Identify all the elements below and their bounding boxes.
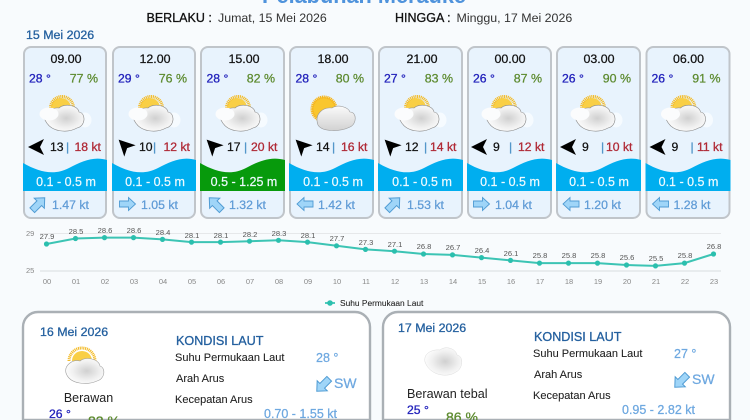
- wave height: [467, 159, 552, 191]
- panel: 18.00 forecast: [289, 47, 374, 218]
- wave height: [23, 159, 107, 191]
- line chart: sea surface temperature: 20: [623, 277, 631, 286]
- panel: 18.00 forecast: 28 °: [296, 72, 317, 86]
- validity start: [146, 11, 327, 25]
- panel: 15.00 forecast: 15.00: [228, 52, 260, 66]
- panel: 18.00 forecast: 80 %: [336, 72, 364, 86]
- line chart: sea surface temperature: 28.1: [214, 231, 228, 240]
- panel: 16 Mei forecast: Berawan: [64, 391, 113, 405]
- line chart: sea surface temperature: 22: [681, 277, 689, 286]
- line chart: sea surface temperature: 26.8: [707, 242, 721, 251]
- panel: 15.00 forecast: 28 °: [206, 72, 228, 86]
- line chart: sea surface temperature: 26.8: [417, 242, 431, 251]
- panel: 03.00 forecast: 26 °: [562, 72, 584, 86]
- wind direction arrow: [113, 134, 136, 157]
- line chart: sea surface temperature: 25.8: [591, 251, 605, 260]
- line chart: sea surface temperature: 28.6: [98, 226, 112, 235]
- wind direction arrow: [28, 139, 44, 155]
- line chart: sea surface temperature: 00: [43, 277, 51, 286]
- panel: 16 Mei forecast: 16 Mei 2026: [40, 325, 108, 339]
- current arrow: [27, 193, 50, 215]
- panel: 16 Mei forecast: Arah Arus: [176, 373, 225, 385]
- panel: 17 Mei forecast: Kecepatan Arus: [533, 390, 611, 402]
- line chart: sea surface temperature: 28.4: [156, 228, 170, 237]
- panel: 06.00 forecast: [646, 47, 730, 218]
- panel: 03.00 forecast: 90 %: [603, 72, 631, 86]
- panel: 00.00 forecast: 26 °: [473, 72, 495, 86]
- panel: 17 Mei forecast: [383, 312, 730, 420]
- icon: partly cloudy: [40, 96, 92, 131]
- line chart: sea surface temperature: 04: [159, 277, 167, 286]
- panel: 15.00 forecast: 17: [227, 140, 241, 154]
- panel: 09.00 forecast: |: [66, 140, 69, 154]
- line chart: sea surface temperature: 08: [275, 277, 283, 286]
- line chart: sea surface temperature: 14: [449, 277, 457, 286]
- panel: 09.00 forecast: 1.47 kt: [52, 198, 89, 212]
- line chart: sea surface temperature: 25.6: [620, 253, 634, 262]
- line chart: sea surface temperature: 12: [391, 277, 399, 286]
- panel: 21.00 forecast: 21.00: [406, 52, 438, 66]
- current direction arrow: [670, 370, 692, 392]
- line chart: sea surface temperature: 26.1: [504, 249, 518, 258]
- panel: 00.00 forecast: [467, 47, 552, 218]
- panel: 15.00 forecast: 1.32 kt: [229, 198, 266, 212]
- panel: 03.00 forecast: 03.00: [583, 52, 615, 66]
- line chart: sea surface temperature: 17: [536, 277, 544, 286]
- wind direction arrow: [560, 139, 576, 155]
- panel: 21.00 forecast: |: [424, 140, 427, 154]
- wave height: [556, 159, 641, 191]
- panel: 06.00 forecast: 06.00: [673, 52, 704, 66]
- panel: 15.00 forecast: 0.5 - 1.25 m: [211, 175, 277, 189]
- panel: 15.00 forecast: |: [244, 140, 247, 154]
- icon: sun behind cloud: [312, 97, 355, 131]
- icon: partly cloudy: [216, 96, 268, 131]
- line chart: sea surface temperature: 10: [333, 277, 341, 286]
- line chart: sea surface temperature: 11: [362, 277, 370, 286]
- validity end: HINGGA :: [395, 11, 451, 25]
- panel: 03.00 forecast: 0.1 - 0.5 m: [569, 175, 629, 189]
- panel: 09.00 forecast: 09.00: [50, 52, 82, 66]
- panel: 18.00 forecast: 14: [316, 140, 330, 154]
- panel: 03.00 forecast: |: [601, 140, 604, 154]
- line chart: sea surface temperature: 13: [420, 277, 428, 286]
- current arrow: [382, 193, 405, 215]
- line chart: sea surface temperature: 16: [507, 277, 515, 286]
- panel: 15.00 forecast: 20 kt: [251, 140, 278, 154]
- panel: 12.00 forecast: 29 °: [118, 72, 140, 86]
- line chart: sea surface temperature: 25: [26, 266, 34, 275]
- current arrow: [297, 198, 313, 210]
- panel: 16 Mei forecast: Suhu Permukaan Laut: [175, 352, 284, 364]
- icon: heavy cloud: [425, 348, 462, 375]
- line chart: sea surface temperature: 27.9: [40, 232, 54, 241]
- panel: 00.00 forecast: |: [509, 140, 512, 154]
- icon: cloudy with sun: [66, 348, 104, 383]
- line chart: sea surface temperature: 26.4: [475, 246, 489, 255]
- panel: 03.00 forecast: 10 kt: [606, 140, 633, 154]
- panel: 17 Mei forecast: 17 Mei 2026: [398, 321, 466, 335]
- line chart: sea surface temperature: 28.5: [69, 227, 83, 236]
- wave height: [112, 159, 196, 191]
- panel: 00.00 forecast: 12 kt: [518, 140, 545, 154]
- panel: 00.00 forecast: 00.00: [494, 52, 526, 66]
- line chart: sea surface temperature: 28.3: [272, 229, 286, 238]
- panel: 18.00 forecast: |: [332, 140, 335, 154]
- panel: 03.00 forecast: 1.20 kt: [584, 198, 621, 212]
- panel: 12.00 forecast: [112, 47, 196, 218]
- line chart: sea surface temperature: 03: [130, 277, 138, 286]
- panel: 03.00 forecast: 9: [582, 140, 589, 154]
- icon: partly cloudy: [482, 96, 534, 131]
- validity end: [395, 11, 572, 25]
- panel: 18.00 forecast: 18.00: [317, 52, 349, 66]
- panel: 06.00 forecast: 0.1 - 0.5 m: [659, 175, 718, 189]
- line chart: sea surface temperature: 05: [188, 277, 196, 286]
- line chart: sea surface temperature: 07: [246, 277, 254, 286]
- panel: 06.00 forecast: 9: [672, 140, 678, 154]
- current direction arrow: [312, 374, 334, 396]
- panel: 00.00 forecast: 9: [493, 140, 500, 154]
- panel: 21.00 forecast: 83 %: [425, 72, 453, 86]
- line chart: sea surface temperature: 27.1: [388, 240, 402, 249]
- line chart: sea surface temperature: 28.2: [243, 230, 257, 239]
- panel: 16 Mei forecast: [23, 312, 370, 420]
- line chart: sea surface temperature: 27.7: [330, 234, 344, 243]
- panel: 12.00 forecast: 1.05 kt: [141, 198, 178, 212]
- panel: 17 Mei forecast: Berawan tebal: [407, 387, 488, 401]
- panel: 09.00 forecast: [23, 47, 107, 218]
- panel: 00.00 forecast: 1.04 kt: [495, 198, 532, 212]
- wind direction arrow: [290, 134, 313, 157]
- wind direction arrow: [471, 139, 487, 155]
- line chart: sea surface temperature: 28.6: [127, 226, 141, 235]
- panel: 18.00 forecast: 16 kt: [341, 140, 368, 154]
- panel: 17 Mei forecast: SW: [692, 371, 715, 387]
- heading: sea condition: KONDISI LAUT: [176, 334, 264, 348]
- panel: 21.00 forecast: [378, 47, 463, 218]
- panel: 09.00 forecast: 28 °: [29, 72, 51, 86]
- panel: 18.00 forecast: 1.42 kt: [318, 198, 355, 212]
- line chart: sea surface temperature: 19: [594, 277, 602, 286]
- panel: 09.00 forecast: 0.1 - 0.5 m: [36, 175, 96, 189]
- wind direction arrow: [650, 139, 666, 155]
- panel: 09.00 forecast: 77 %: [70, 72, 98, 86]
- panel: 00.00 forecast: 0.1 - 0.5 m: [480, 175, 540, 189]
- panel: 16 Mei forecast: Kecepatan Arus: [175, 394, 253, 406]
- panel: 06.00 forecast: 91 %: [692, 72, 720, 86]
- wave height: [378, 159, 463, 191]
- panel: 09.00 forecast: 13: [50, 140, 64, 154]
- current arrow: [474, 198, 490, 210]
- panel: 21.00 forecast: 12: [405, 140, 419, 154]
- line chart: sea surface temperature: 29: [26, 229, 34, 238]
- wave height: [289, 159, 374, 191]
- panel: 12.00 forecast: 12.00: [139, 52, 171, 66]
- panel: 12.00 forecast: 76 %: [159, 72, 187, 86]
- line chart: sea surface temperature: 02: [101, 277, 109, 286]
- panel: 16 Mei forecast: 28 °: [316, 351, 338, 365]
- validity end: Minggu, 17 Mei 2026: [456, 11, 572, 25]
- panel: 12.00 forecast: 0.1 - 0.5 m: [125, 175, 185, 189]
- wind direction arrow: [379, 134, 402, 157]
- panel: 12.00 forecast: |: [153, 140, 156, 154]
- panel: 15.00 forecast: 82 %: [247, 72, 275, 86]
- icon: partly cloudy: [128, 96, 180, 131]
- line chart: sea surface temperature: [26, 226, 721, 286]
- panel: 06.00 forecast: |: [690, 140, 694, 154]
- panel: 17 Mei forecast: Arah Arus: [534, 369, 583, 381]
- icon: partly cloudy: [570, 96, 622, 131]
- line chart: sea surface temperature: 18: [565, 277, 573, 286]
- current arrow: [652, 198, 668, 210]
- panel: 06.00 forecast: 26 °: [652, 72, 673, 86]
- panel: 00.00 forecast: 87 %: [514, 72, 542, 86]
- panel: 06.00 forecast: 11 kt: [697, 140, 723, 154]
- current arrow: [204, 193, 227, 215]
- panel: 17 Mei forecast: Suhu Permukaan Laut: [533, 348, 642, 360]
- date heading: 15 Mei 2026: [26, 28, 94, 42]
- line chart: sea surface temperature: 25.8: [562, 251, 576, 260]
- panel: 03.00 forecast: [556, 47, 641, 218]
- line chart: sea surface temperature: 28.1: [185, 231, 199, 240]
- line chart: sea surface temperature: 23: [710, 277, 718, 286]
- panel: 21.00 forecast: 27 °: [384, 72, 406, 86]
- line chart: sea surface temperature: 25.5: [649, 254, 663, 263]
- wind direction arrow: [201, 134, 224, 157]
- panel: 21.00 forecast: 0.1 - 0.5 m: [392, 175, 452, 189]
- panel: 09.00 forecast: 18 kt: [74, 140, 102, 154]
- panel: 15.00 forecast: [200, 47, 285, 218]
- validity start: BERLAKU :: [146, 11, 212, 25]
- line chart: sea surface temperature: 09: [304, 277, 312, 286]
- validity start: Jumat, 15 Mei 2026: [218, 11, 327, 25]
- current arrow: [120, 198, 136, 210]
- line chart: sea surface temperature: 25.8: [533, 251, 547, 260]
- line chart: sea surface temperature: 01: [72, 277, 80, 286]
- icon: partly cloudy: [661, 96, 713, 131]
- line chart: sea surface temperature: 27.3: [359, 238, 373, 247]
- heading: sea condition: KONDISI LAUT: [534, 330, 622, 344]
- panel: 17 Mei forecast: 0.95 - 2.82 kt: [622, 403, 695, 417]
- panel: 16 Mei forecast: SW: [334, 375, 357, 391]
- wave height: [200, 159, 285, 191]
- line chart: sea surface temperature: 28.1: [301, 231, 315, 240]
- panel: 12.00 forecast: 10: [139, 140, 153, 154]
- current arrow: [563, 198, 579, 210]
- panel: 17 Mei forecast: 25 °: [407, 403, 429, 417]
- chart legend: Suhu Permukaan Laut: [340, 298, 424, 308]
- wave height: [646, 159, 730, 191]
- icon: partly cloudy: [394, 96, 446, 131]
- panel: 21.00 forecast: 1.53 kt: [407, 198, 444, 212]
- line chart: sea surface temperature: 26.7: [446, 243, 460, 252]
- panel: 12.00 forecast: 12 kt: [164, 140, 191, 154]
- line chart: sea surface temperature: 06: [217, 277, 225, 286]
- line chart: sea surface temperature: 15: [478, 277, 486, 286]
- line chart: sea surface temperature: 21: [652, 277, 660, 286]
- panel: 17 Mei forecast: 27 °: [674, 347, 696, 361]
- line chart: sea surface temperature: 25.8: [678, 251, 692, 260]
- panel: 21.00 forecast: 14 kt: [430, 140, 457, 154]
- panel: 18.00 forecast: 0.1 - 0.5 m: [303, 175, 363, 189]
- panel: 06.00 forecast: 1.28 kt: [674, 198, 711, 212]
